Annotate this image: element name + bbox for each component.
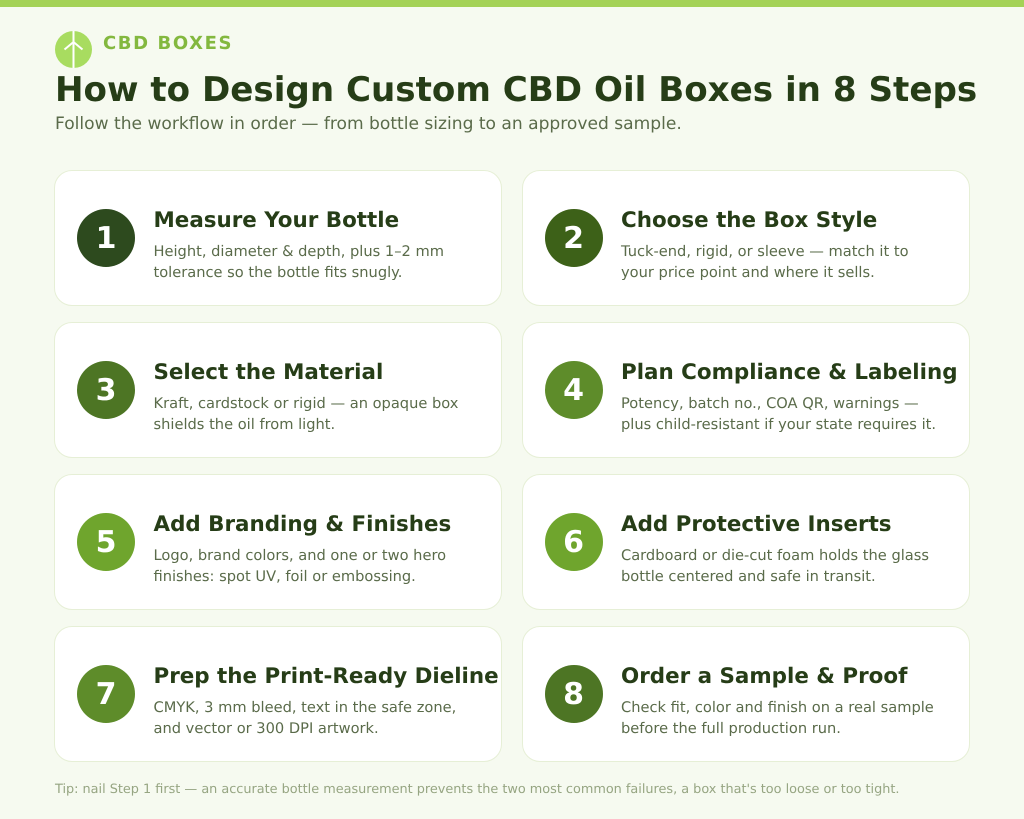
top accent bar: [0, 0, 1024, 7]
step 7 text: and vector or 300 DPI artwork.: [154, 720, 379, 737]
panel: step 7: [54, 626, 502, 762]
step 1 text: tolerance so the bottle fits snugly.: [154, 264, 402, 281]
step 2 badge: [544, 209, 602, 267]
panel: step 1: [54, 170, 502, 306]
step 5 badge: [77, 513, 135, 571]
step 1 heading: Measure Your Bottle: [154, 208, 399, 232]
icon: brand leaf logo: [55, 31, 92, 68]
step 2 text: your price point and where it sells.: [621, 264, 875, 281]
panel: step 4: [522, 322, 970, 458]
subtitle: Follow the workflow in order — from bottle sizing to an approved sample.: [55, 114, 682, 134]
brand name: CBD BOXES: [103, 33, 233, 54]
step 4 number: 4: [563, 373, 584, 408]
step 4 badge: [544, 361, 602, 419]
step 8 text: [621, 699, 934, 737]
step 6 badge: [544, 513, 602, 571]
step 2 text: [620, 243, 909, 281]
step 1 text: [154, 243, 444, 281]
step 7 text: [154, 699, 456, 737]
step 8 text: Check fit, color and finish on a real sample: [621, 699, 934, 716]
step 3 number: 3: [96, 373, 116, 408]
step 7 heading: Prep the Print-Ready Dieline: [154, 664, 499, 688]
panel: step 3: [54, 322, 502, 458]
step 6 text: Cardboard or die-cut foam holds the glass: [621, 547, 929, 564]
panel: step 2: [522, 170, 970, 306]
step 2 heading: Choose the Box Style: [621, 208, 877, 232]
step 5 text: Logo, brand colors, and one or two hero: [154, 547, 446, 564]
step 1 text: Height, diameter & depth, plus 1–2 mm: [154, 243, 444, 260]
step 4 text: [621, 395, 936, 433]
panel: step 6: [522, 474, 970, 610]
step 7 badge: [77, 665, 135, 723]
step 3 text: [154, 395, 458, 433]
panel: step 5: [54, 474, 502, 610]
step 4 text: plus child-resistant if your state requires it.: [621, 416, 936, 433]
step 3 badge: [77, 361, 135, 419]
title: How to Design Custom CBD Oil Boxes in 8 Steps: [55, 70, 977, 110]
step 5 text: [154, 547, 446, 585]
step 4 text: Potency, batch no., COA QR, warnings —: [621, 395, 919, 412]
step 1 number: 1: [96, 221, 116, 256]
footer tip: Tip: nail Step 1 first — an accurate bottle measurement prevents the two most common failures, a box that's too loose or too tight.: [55, 782, 899, 797]
step 6 number: 6: [563, 525, 584, 560]
panel: step 8: [522, 626, 970, 762]
step 6 heading: Add Protective Inserts: [621, 512, 892, 536]
step 2 text: Tuck-end, rigid, or sleeve — match it to: [621, 243, 909, 260]
step 4 heading: Plan Compliance & Labeling: [621, 360, 958, 384]
step 8 text: before the full production run.: [621, 720, 841, 737]
step 1 badge: [77, 209, 135, 267]
step 6 text: [621, 547, 929, 585]
step 6 text: bottle centered and safe in transit.: [621, 568, 876, 585]
step 8 badge: [544, 665, 602, 723]
step 5 heading: Add Branding & Finishes: [154, 512, 451, 536]
step 5 text: finishes: spot UV, foil or embossing.: [154, 568, 416, 585]
step 3 text: Kraft, cardstock or rigid — an opaque box: [154, 395, 458, 412]
step 8 heading: Order a Sample & Proof: [621, 664, 907, 688]
step 3 text: shields the oil from light.: [154, 416, 335, 433]
step 7 number: 7: [96, 677, 116, 712]
step 3 heading: Select the Material: [154, 360, 383, 384]
step 8 number: 8: [563, 677, 584, 712]
step 2 number: 2: [563, 221, 584, 256]
step 7 text: CMYK, 3 mm bleed, text in the safe zone,: [154, 699, 456, 716]
step 5 number: 5: [96, 525, 116, 560]
